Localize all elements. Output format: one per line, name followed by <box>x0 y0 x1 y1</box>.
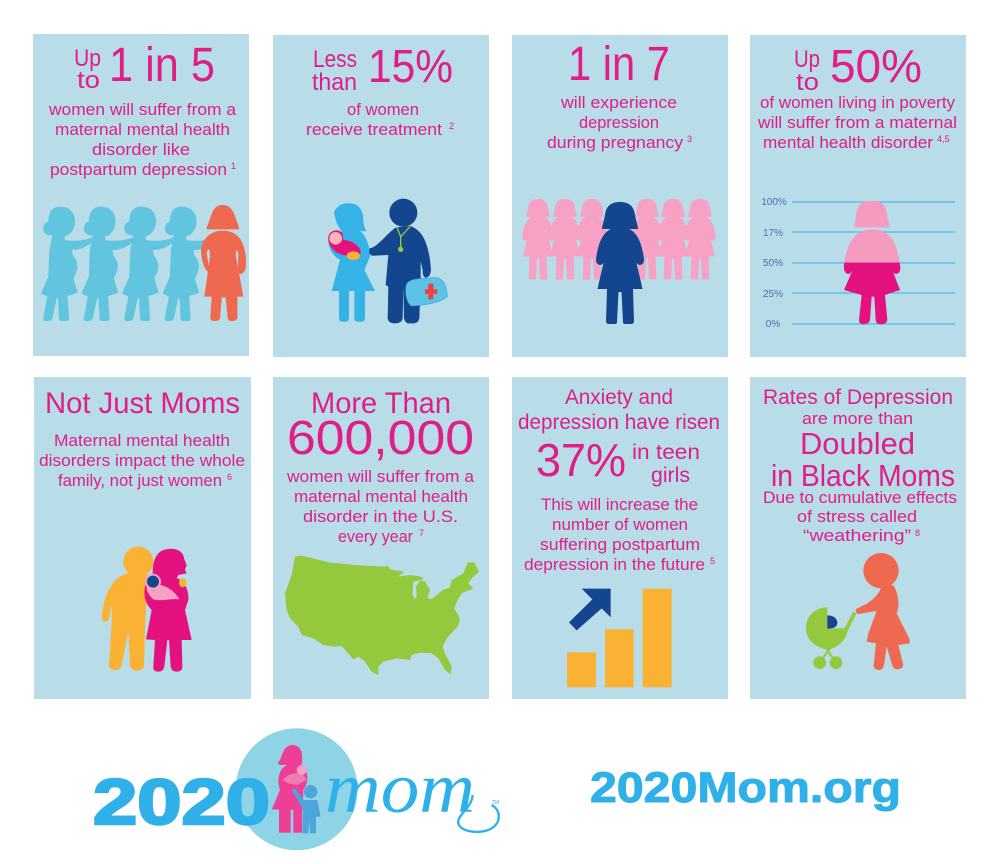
heading: up to 50% <box>794 40 922 96</box>
heading: anxiety and depression have risen 37%: 37% <box>536 434 626 486</box>
text block: impact on whole family: 6 <box>227 472 232 482</box>
icon: mother with newborn and doctor <box>328 199 447 323</box>
heading: rates of depression doubled in Black moms: Rates of Depression <box>763 386 953 409</box>
text block: postpartum statistic <box>48 100 237 179</box>
text block: postpartum statistic: postpartum depression <box>50 160 227 179</box>
heading: up to 1 in 5: Up <box>74 45 101 72</box>
trademark: TM <box>492 800 499 806</box>
text block: postpartum statistic: 1 <box>231 161 236 171</box>
text block: postpartum statistic: women will suffer from a <box>48 100 237 119</box>
heading: rates of depression doubled in Black moms: in Black Moms <box>771 458 955 493</box>
heading: anxiety and depression have risen 37% <box>518 386 720 487</box>
heading: up to 50%: Up <box>794 46 820 73</box>
chart: percentage scale with half-filled woman <box>761 197 955 330</box>
text block: depression during pregnancy: will experience <box>560 93 677 112</box>
website address: 2020Mom.org <box>590 764 901 812</box>
text block: future postpartum increase <box>524 495 715 574</box>
text block: receive treatment: of women <box>347 100 419 119</box>
text block: women per year: women will suffer from a <box>286 467 475 486</box>
text block: receive treatment: receive treatment <box>306 120 442 139</box>
text block: future postpartum increase: 5 <box>710 556 715 566</box>
heading: less than 15%: Less <box>313 46 357 73</box>
heading: more than 600,000: More Than <box>311 387 451 420</box>
chart: percentage scale with half-filled woman: 50% <box>763 258 783 269</box>
text block: women per year <box>286 467 475 546</box>
text block: receive treatment <box>306 100 454 139</box>
heading: up to 1 in 5: 1 in 5 <box>109 39 215 92</box>
heading: anxiety and depression have risen 37%: girls <box>651 464 690 487</box>
text block: impact on whole family: Maternal mental health <box>54 431 230 450</box>
panel: 1 in 5 <box>33 34 249 356</box>
text block: receive treatment: 2 <box>449 121 454 131</box>
panel: 1 in 7 <box>512 35 728 357</box>
heading: not just moms: Not Just Moms <box>45 387 240 420</box>
logo wordmark: 2020: 2020 <box>93 766 270 838</box>
panel: up to 50% <box>750 35 966 357</box>
text block: women per year: 7 <box>419 528 424 538</box>
heading: 1 in 7: 1 in 7 <box>568 38 670 91</box>
panel: anxiety and depression in teens <box>512 377 728 699</box>
heading: anxiety and depression have risen 37%: depression have risen <box>518 411 720 434</box>
text block: weathering: Due to cumulative effects <box>763 488 957 507</box>
heading: up to 1 in 5: to <box>77 67 100 94</box>
text block: future postpartum increase: depression in the future <box>524 555 705 574</box>
text block: women living in poverty: will suffer from a maternal <box>757 113 957 132</box>
chart: percentage scale with half-filled woman: 0% <box>766 319 780 330</box>
heading: up to 1 in 5 <box>74 39 215 94</box>
panel: less than 15% <box>273 35 489 357</box>
heading: less than 15% <box>312 40 453 96</box>
icon: mother pushing stroller <box>806 553 910 670</box>
text block: depression during pregnancy: depression <box>579 113 659 132</box>
heading: more than 600,000 <box>287 387 474 465</box>
text block: women living in poverty <box>757 93 957 152</box>
text block: women living in poverty: of women living in poverty <box>760 93 955 112</box>
text block: impact on whole family <box>39 431 245 490</box>
panel: not just moms <box>34 377 251 699</box>
icon: row of pregnant women with one highlighted <box>41 205 246 321</box>
heading: anxiety and depression have risen 37%: Anxiety and <box>565 386 673 409</box>
heading: rates of depression doubled in Black moms <box>763 386 955 493</box>
text block: women living in poverty: mental health disorder <box>763 133 933 152</box>
text block: weathering: “weathering” <box>803 526 911 545</box>
map: United States <box>285 556 479 675</box>
text block: women living in poverty: 4,5 <box>937 134 950 144</box>
chart: percentage scale with half-filled woman: 17% <box>763 228 783 239</box>
text block: impact on whole family: disorders impact the whole <box>39 451 245 470</box>
heading: anxiety and depression have risen 37%: in teen <box>632 441 700 464</box>
logo swash <box>458 795 499 832</box>
text block: future postpartum increase: number of women <box>552 515 688 534</box>
icon: seven women with one highlighted <box>522 199 716 324</box>
text block: women per year: maternal mental health <box>294 487 468 506</box>
text block: postpartum statistic: disorder like <box>92 140 190 159</box>
heading: rates of depression doubled in Black moms: are more than <box>802 409 913 428</box>
heading: rates of depression doubled in Black moms: Doubled <box>800 426 915 461</box>
heading: up to 50%: 50% <box>830 40 922 92</box>
text block: impact on whole family: family, not just women <box>58 471 222 490</box>
text block: depression during pregnancy: during pregnancy <box>547 133 684 152</box>
text block: depression during pregnancy <box>547 93 692 152</box>
heading: less than 15%: 15% <box>368 40 453 92</box>
logo wordmark: mom script: mom <box>325 748 475 828</box>
text block: future postpartum increase: This will increase the <box>541 495 698 514</box>
panel: more than 600,000 <box>273 377 489 699</box>
chart: percentage scale with half-filled woman: 25% <box>763 289 783 300</box>
text block: depression during pregnancy: 3 <box>687 134 692 144</box>
heading: less than 15%: than <box>312 69 357 96</box>
text block: postpartum statistic: maternal mental health <box>55 120 230 139</box>
heading: up to 50%: to <box>796 69 819 96</box>
logo icon: mother with baby and child <box>272 745 321 833</box>
text block: women per year: every year <box>338 527 413 546</box>
text block: women per year: disorder in the U.S. <box>303 507 458 526</box>
text block: weathering: 8 <box>915 528 920 538</box>
text block: weathering: of stress called <box>797 507 917 526</box>
chart: rising bars with arrow <box>567 589 672 687</box>
logo: 2020 Mom <box>93 728 499 850</box>
icon: father and mother with baby <box>102 547 192 672</box>
text block: weathering <box>763 488 957 545</box>
chart: percentage scale with half-filled woman: 100% <box>761 197 787 208</box>
text block: future postpartum increase: suffering postpartum <box>540 535 700 554</box>
panel: rates of depression in Black moms <box>750 377 966 699</box>
heading: more than 600,000: 600,000 <box>287 412 474 465</box>
